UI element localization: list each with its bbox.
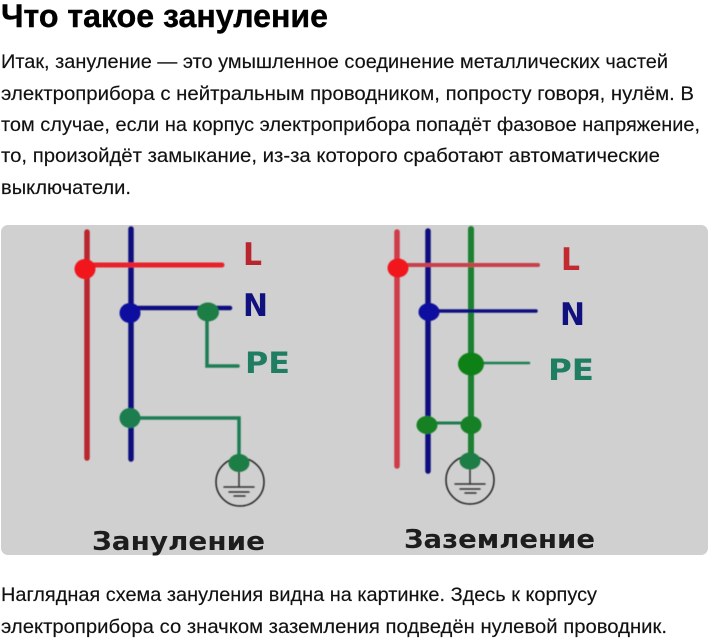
intro paragraph: электроприбора с нейтральным проводником, попросту говоря, нулём. В xyxy=(1,83,694,105)
icon: ground symbol right xyxy=(446,452,494,504)
intro paragraph: то, произойдёт замыкание, из-за которого сработают автоматические xyxy=(1,145,660,167)
label: L right: L xyxy=(561,242,580,278)
intro paragraph: Итак, зануление — это умышленное соединение металлических частей xyxy=(1,51,668,73)
intro paragraph xyxy=(1,51,700,199)
caption: заземление: Заземление xyxy=(404,525,595,555)
label: N right: N xyxy=(560,297,585,333)
intro paragraph: выключатели. xyxy=(1,177,131,199)
label: PE right: PE xyxy=(548,353,594,387)
intro paragraph: том случае, если на корпус электроприбора попадёт фазовое напряжение, xyxy=(1,114,700,136)
closing paragraph: Наглядная схема зануления видна на картинке. Здесь к корпусу xyxy=(1,584,597,606)
closing paragraph: электроприбора со значком заземления подведён нулевой проводник. xyxy=(1,616,667,638)
label: N left: N xyxy=(243,288,268,324)
caption: зануление: Зануление xyxy=(92,527,265,557)
icon: ground symbol xyxy=(216,454,264,506)
closing paragraph xyxy=(1,584,667,638)
diagram: заземление xyxy=(388,229,538,504)
panel: diagram background xyxy=(1,225,708,555)
diagram: зануление xyxy=(74,229,264,506)
label: L left: L xyxy=(243,237,262,273)
label: PE left: PE xyxy=(245,346,290,380)
